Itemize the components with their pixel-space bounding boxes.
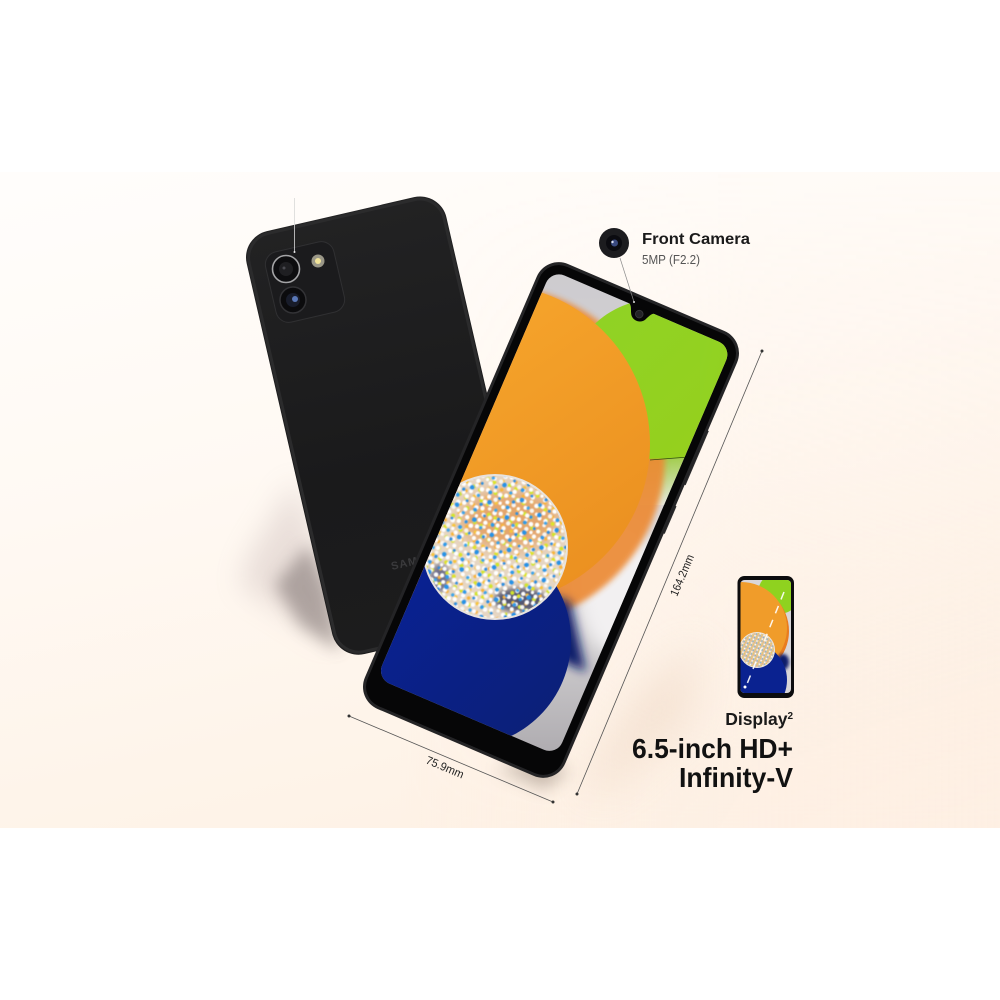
front phone (363, 262, 739, 778)
display headline: Infinity-V (679, 762, 793, 793)
screen wallpaper (381, 274, 728, 751)
display label: 2 (787, 711, 793, 722)
front camera callout (599, 228, 750, 303)
front camera spec: 5MP (F2.2) (642, 252, 700, 267)
orange back crescent (408, 288, 668, 612)
mini phone display icon (738, 576, 794, 698)
soft shadows under the phones (240, 480, 700, 790)
width dimension (348, 714, 554, 804)
blue circle (381, 536, 571, 736)
logo: SAMSUNG (390, 547, 454, 573)
width dimension: 75.9mm (424, 755, 465, 781)
rear camera callout line (294, 198, 296, 253)
white glow (577, 537, 650, 658)
lens two (280, 287, 306, 313)
notch (621, 301, 658, 327)
blue shadow (548, 595, 586, 672)
front camera heading: Front Camera (642, 231, 750, 248)
height dimension (576, 350, 764, 796)
infographic canvas (0, 172, 1000, 828)
glitter circle (420, 470, 570, 625)
orange circle (416, 292, 650, 589)
phone body (355, 255, 747, 786)
display headline: 6.5-inch HD+ (632, 733, 793, 764)
lens one (272, 256, 300, 282)
display headline (632, 733, 793, 793)
light green strip (648, 454, 686, 505)
back of the phone (241, 191, 538, 660)
camera lens icon (599, 228, 629, 258)
flash (312, 254, 324, 268)
green circle (595, 304, 728, 459)
height dimension: 164.2mm (669, 553, 697, 598)
display label: Display (725, 709, 787, 729)
camera module (263, 239, 347, 325)
background band (0, 172, 1000, 828)
